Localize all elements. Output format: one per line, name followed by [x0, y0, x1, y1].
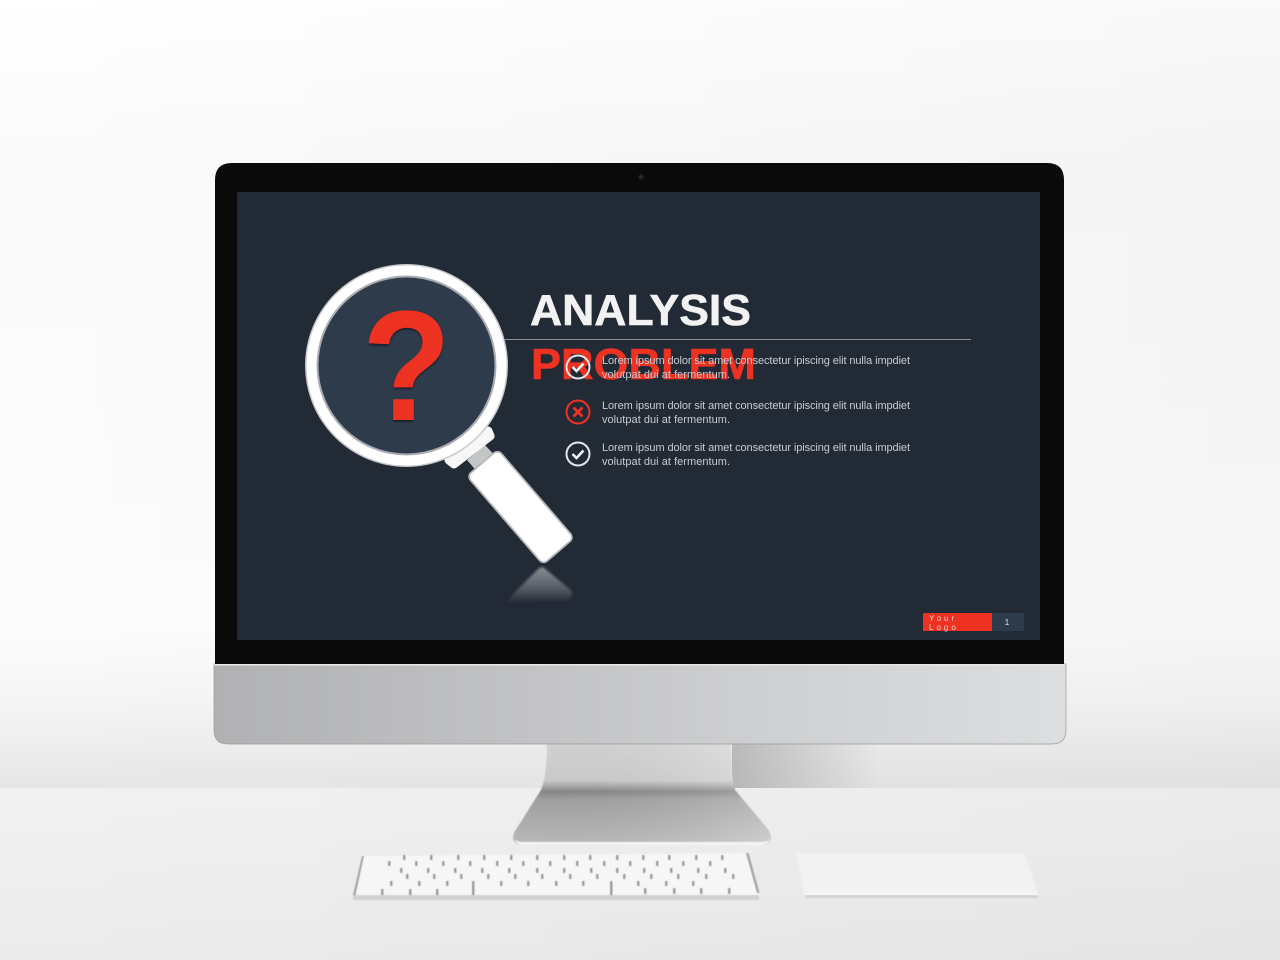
page number [992, 613, 1024, 631]
icon: check [566, 442, 590, 466]
text: Lorem ipsum dolor sit amet consectetur ipiscing elit nulla impdiet [602, 400, 910, 412]
chin highlight [214, 664, 1065, 666]
title: PROBLEM: PROBLEM [531, 340, 756, 389]
icon: cross [566, 400, 590, 424]
connector [467, 445, 497, 474]
list item 3 [566, 442, 910, 468]
list item 1 [566, 355, 910, 381]
title: ANALYSIS: ANALYSIS [530, 286, 751, 335]
text: Lorem ipsum dolor sit amet consectetur ipiscing elit nulla impdiet [602, 355, 910, 367]
list item 2 [566, 400, 910, 426]
magnifying glass [305, 264, 572, 603]
handle [474, 457, 566, 557]
page number: 1 [1005, 618, 1010, 627]
handle reflection [507, 567, 572, 603]
text: volutpat dui at fermentum. [602, 369, 730, 381]
text: volutpat dui at fermentum. [602, 456, 730, 468]
camera [638, 174, 644, 180]
slide screen [237, 192, 1040, 640]
question mark: ? [362, 279, 451, 454]
trackpad [797, 853, 1038, 898]
monitor stand [513, 744, 771, 845]
collar [449, 431, 490, 464]
footer logo badge: Your [929, 614, 957, 623]
monitor body [214, 163, 1066, 744]
lens [318, 278, 494, 454]
keyboard [353, 853, 760, 900]
text: Lorem ipsum dolor sit amet consectetur ipiscing elit nulla impdiet [602, 442, 910, 454]
footer logo badge: Logo [929, 623, 959, 632]
footer logo badge [923, 613, 992, 632]
text: volutpat dui at fermentum. [602, 414, 730, 426]
lens ring [305, 264, 508, 467]
monitor black bezel [215, 163, 1064, 664]
icon: check [566, 356, 590, 378]
monitor chin [214, 664, 1066, 744]
heading rule [505, 339, 971, 340]
